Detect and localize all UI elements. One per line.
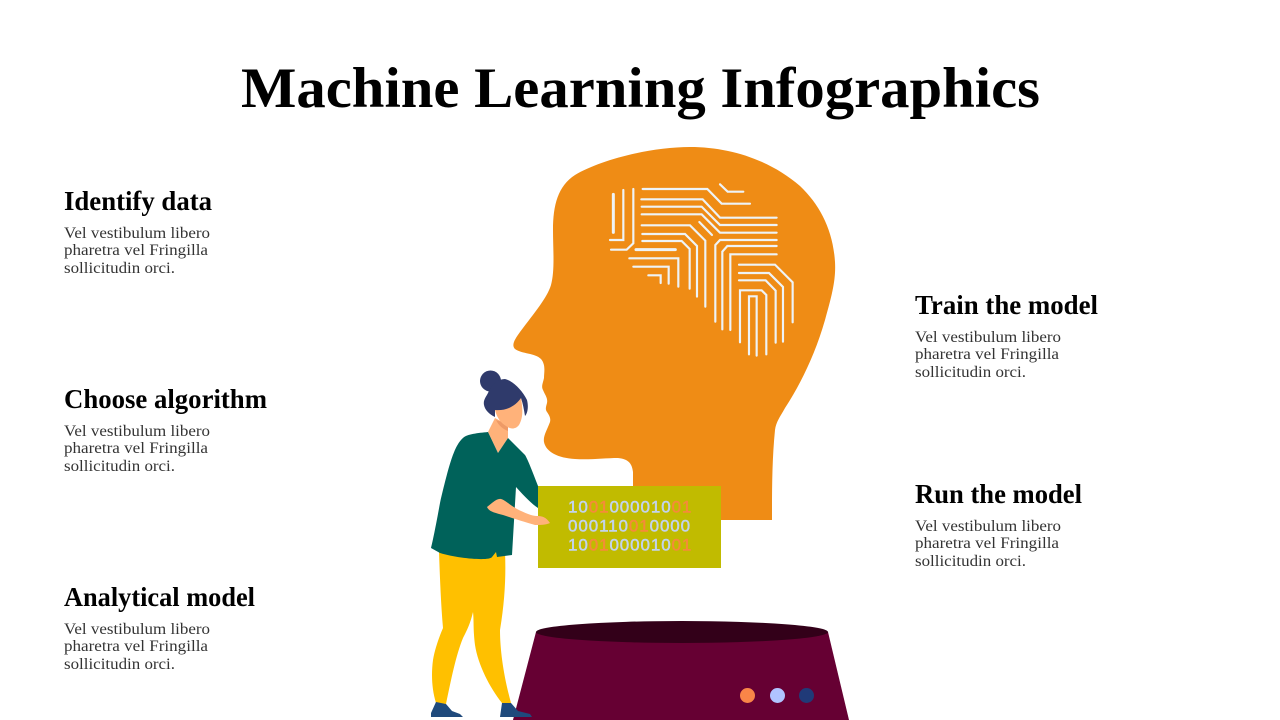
text block: run the model: pharetra vel Fringilla — [915, 535, 1059, 552]
text block: train the model: pharetra vel Fringilla — [915, 346, 1059, 363]
text block: train the model: Vel vestibulum libero — [915, 329, 1061, 346]
text block: choose algorithm: pharetra vel Fringilla — [64, 440, 208, 457]
text block: choose algorithm — [64, 384, 267, 475]
text block: analytical model: Vel vestibulum libero — [64, 621, 210, 638]
text block: identify data: Vel vestibulum libero — [64, 225, 210, 242]
text block: run the model: Vel vestibulum libero — [915, 518, 1061, 535]
text block: analytical model: Analytical model — [64, 582, 255, 612]
icon: orange head silhouette — [513, 147, 835, 520]
text block: identify data: pharetra vel Fringilla — [64, 242, 208, 259]
text block: train the model: Train the model — [915, 290, 1098, 320]
text block: identify data: Identify data — [64, 186, 212, 216]
text block: identify data — [64, 186, 212, 277]
panel: binary code screen: 000110010000 — [568, 516, 691, 536]
panel: binary code screen: 100100001001 — [568, 536, 692, 554]
text block: choose algorithm: sollicitudin orci. — [64, 458, 175, 475]
text block: train the model: sollicitudin orci. — [915, 364, 1026, 381]
text block: choose algorithm: Choose algorithm — [64, 384, 267, 414]
text block: run the model — [915, 479, 1082, 570]
icon: machine base — [513, 621, 849, 720]
text block: choose algorithm: Vel vestibulum libero — [64, 423, 210, 440]
text block: analytical model: pharetra vel Fringilla — [64, 638, 208, 655]
text block: analytical model: sollicitudin orci. — [64, 656, 175, 673]
text block: run the model: Run the model — [915, 479, 1082, 509]
panel: binary code screen — [538, 486, 721, 568]
title: Machine Learning Infographics — [241, 57, 1040, 120]
icon: woman figure — [431, 370, 550, 717]
icon: circuit brain — [610, 184, 793, 356]
text block: identify data: sollicitudin orci. — [64, 260, 175, 277]
panel: binary code screen: 100100001001 — [568, 498, 692, 516]
text block: train the model — [915, 290, 1098, 381]
text block: analytical model — [64, 582, 255, 673]
text block: run the model: sollicitudin orci. — [915, 553, 1026, 570]
